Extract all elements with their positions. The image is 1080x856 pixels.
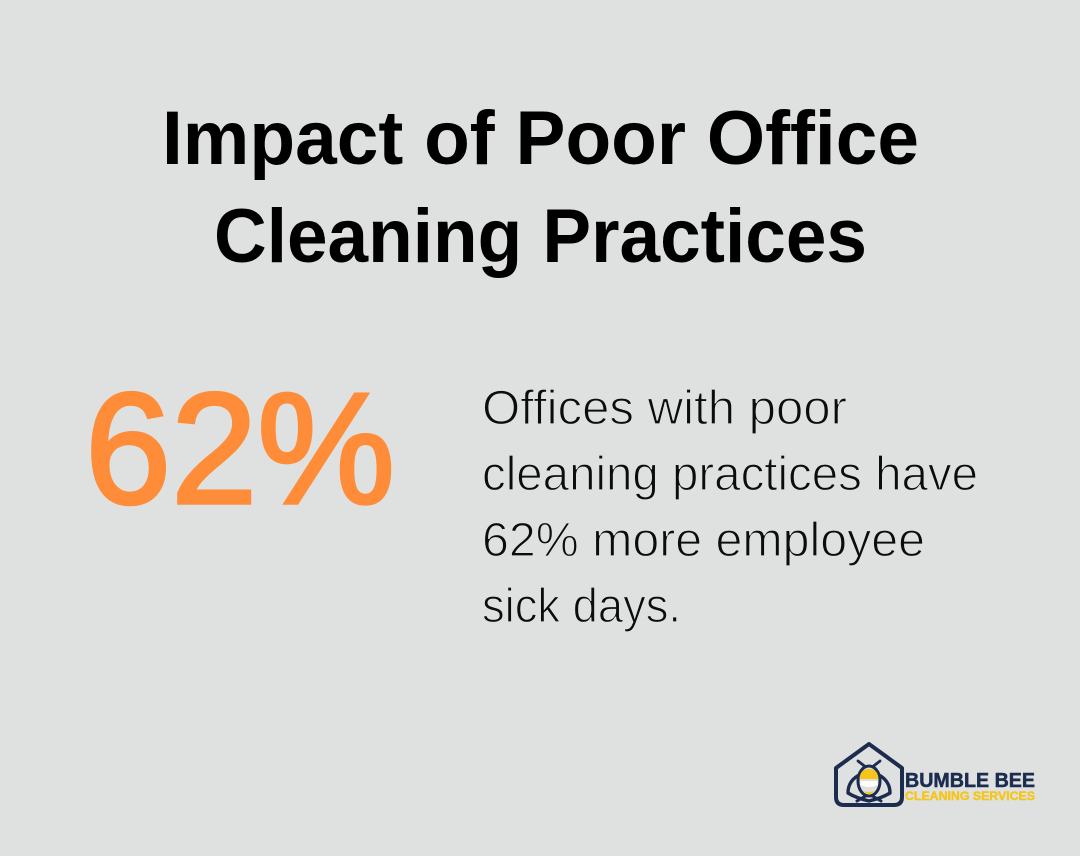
big statistic: 62%: 62% (85, 361, 395, 537)
description text: sick days. (482, 580, 681, 633)
title (162, 96, 919, 279)
title: Cleaning Practices (214, 194, 867, 279)
description text: cleaning practices have (482, 448, 978, 501)
description text: 62% more employee (482, 514, 925, 567)
logo tagline: CLEANING SERVICES (905, 791, 1035, 803)
description text: Offices with poor (482, 382, 847, 435)
logo: Bumble Bee Cleaning Services (836, 744, 1035, 805)
description text (482, 382, 978, 633)
title: Impact of Poor Office (162, 96, 919, 181)
icon: house with bee (836, 744, 902, 805)
logo name: BUMBLE BEE (905, 770, 1035, 792)
